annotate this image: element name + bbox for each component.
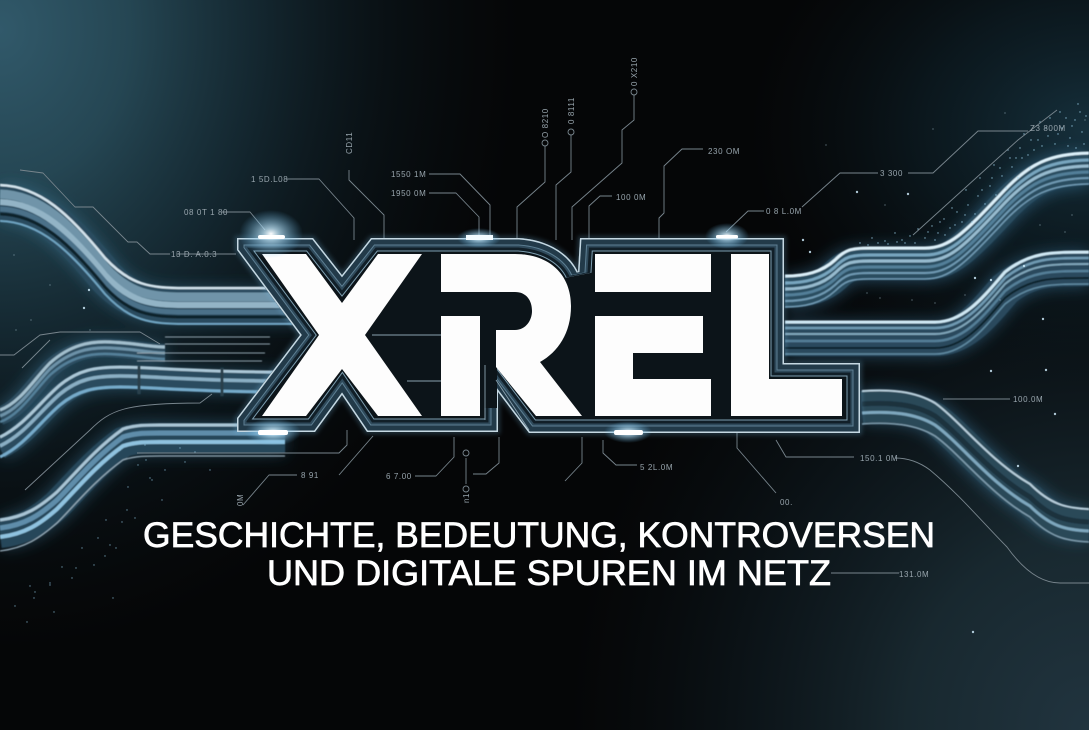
- technical labels: 100.0M: [1013, 395, 1043, 404]
- XREL logo: [237, 210, 860, 446]
- technical labels: [171, 57, 1066, 579]
- technical labels: 5 2L.0M: [640, 463, 673, 472]
- technical labels: 3 300: [880, 169, 903, 178]
- technical labels: 1950 0M: [391, 189, 426, 198]
- light tubes: left: [0, 185, 305, 551]
- technical labels: 100 0M: [616, 193, 646, 202]
- technical labels: 1 5D.L08: [251, 175, 288, 184]
- leader lines: [0, 89, 1089, 583]
- technical labels: 0 8111: [567, 97, 576, 124]
- technical labels: 8 91: [301, 471, 319, 480]
- light tubes: right: [785, 153, 1089, 542]
- subtitle: [143, 516, 935, 593]
- technical labels: 0 X210: [630, 57, 639, 86]
- technical labels: 1550 1M: [391, 170, 426, 179]
- technical labels: 0 8 L.0M: [766, 207, 802, 216]
- technical labels: 13 D. A.0.3: [171, 250, 217, 259]
- logo frame: [237, 238, 860, 433]
- technical labels: CD11: [345, 132, 354, 154]
- technical labels: Z3 800M: [1030, 124, 1066, 133]
- technical labels: 230 OM: [708, 147, 740, 156]
- letter X: [262, 254, 422, 416]
- technical labels: 131.0M: [899, 570, 929, 579]
- letter R: [441, 254, 582, 416]
- letter L: [731, 254, 842, 416]
- letter E: [595, 254, 711, 416]
- technical labels: 08 0T 1 80: [184, 208, 228, 217]
- technical labels: n1: [462, 493, 471, 503]
- subtitle: GESCHICHTE, BEDEUTUNG, KONTROVERSEN: [143, 516, 935, 555]
- technical labels: O 8210: [541, 108, 550, 138]
- technical labels: 150.1 0M: [860, 454, 898, 463]
- particles: [14, 104, 1086, 632]
- technical labels: 00.: [780, 498, 793, 507]
- technical labels: 6 7.00: [386, 472, 412, 481]
- logo letters: [262, 254, 842, 416]
- subtitle: UND DIGITALE SPUREN IM NETZ: [267, 554, 831, 593]
- logo light flares: [239, 210, 749, 446]
- technical labels: 0M: [236, 494, 245, 506]
